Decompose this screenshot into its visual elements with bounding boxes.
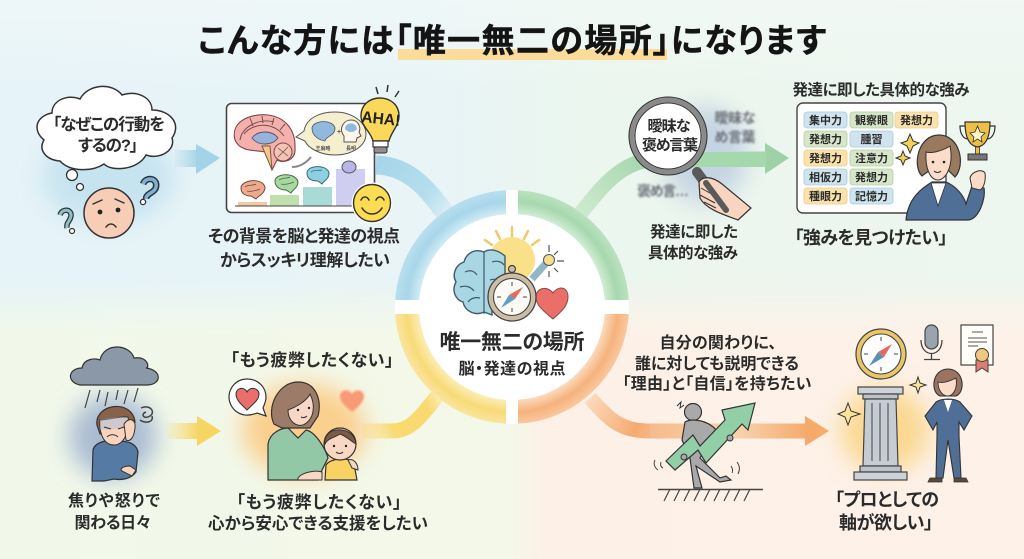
ring segment: yellow <box>395 314 506 424</box>
arrow: yellow <box>167 416 221 446</box>
chip row 2: 腫習 <box>860 132 882 146</box>
icon: question mark left <box>60 210 74 234</box>
chip row 5: 種眼力 <box>809 189 842 203</box>
icon: magnifier and hand: 褒め言葉 <box>642 137 698 154</box>
icon: worried face <box>84 188 134 238</box>
icon: compass <box>856 329 906 379</box>
caption top: 自分の関わりに、 <box>660 333 776 352</box>
icon: sparkles <box>838 377 926 425</box>
ring segment: blue <box>395 190 506 300</box>
chip row 5 <box>804 188 893 204</box>
panel: exhausted to calm (bottom left) <box>68 347 428 533</box>
blurred words <box>637 110 756 199</box>
icon: smiley <box>352 184 392 222</box>
caption top: 誰に対しても説明できる <box>635 354 799 373</box>
glow behind mother and child <box>242 384 366 476</box>
panel: professional backbone (bottom right) <box>622 325 993 533</box>
icon: confident woman <box>906 135 985 220</box>
small curved arrow <box>292 157 311 167</box>
center icon: sun, brain, compass, wand, heart <box>440 227 584 378</box>
compass <box>488 266 536 321</box>
chip row 1: 集中力 <box>809 113 842 127</box>
icon: rain cloud <box>70 347 158 408</box>
icon: mother <box>268 382 328 480</box>
caption <box>208 492 428 533</box>
central ring <box>395 190 629 424</box>
wand <box>532 245 564 279</box>
caption bottom: 「プロとしての <box>835 490 939 510</box>
connector: blue curve to ring <box>376 165 446 214</box>
icon: ground hatch <box>658 489 763 501</box>
chip row 4 <box>804 169 893 185</box>
icon: glowing heart <box>340 390 364 412</box>
chip row 1 <box>804 112 938 128</box>
card: strengths chips <box>797 103 946 213</box>
icon: certificate <box>961 325 993 372</box>
chip row 2 <box>804 131 893 147</box>
chip row 4: 相仮力 <box>809 170 842 184</box>
connector: green curve and arrow <box>580 143 789 214</box>
glow behind person <box>69 395 157 479</box>
caption: 「もう疲弊したくない」 <box>236 492 402 512</box>
blurred words: 褒め言… <box>637 183 689 199</box>
chip row 4: 発想力 <box>855 170 888 184</box>
arrow: blue <box>175 144 220 174</box>
caption bottom <box>835 490 939 533</box>
quote: 「強みを見つけたい」 <box>794 228 948 248</box>
chip row 3: 発想力 <box>809 151 842 165</box>
thought cloud bubble <box>37 86 176 170</box>
staircase bars with brains <box>235 161 365 206</box>
icon: heart speech bubble <box>229 379 266 416</box>
chip row 1: 観察眼 <box>855 113 888 127</box>
icon: magnifier and hand: 曖昧な <box>648 118 691 135</box>
heart <box>536 288 568 319</box>
title highlight <box>398 49 667 60</box>
caption bottom: 軸が欲しい」 <box>839 512 933 533</box>
chip row 2: 発想力 <box>809 132 842 146</box>
speech bubble: two brains: 王廃略 <box>315 145 331 152</box>
icon: question mark right <box>140 179 156 205</box>
icon: microphone <box>921 325 942 360</box>
center title text: 唯一無二の場所 <box>440 331 584 354</box>
icon: professional woman <box>925 369 972 482</box>
panel: brain diagram <box>226 104 374 212</box>
icon: troubled person <box>92 406 138 481</box>
chip row 3 <box>804 150 893 166</box>
caption: 焦りや怒りで <box>68 491 160 510</box>
thought dots <box>66 170 84 190</box>
chip row 1: 発想力 <box>900 113 933 127</box>
caption: 発達に即した <box>650 223 738 241</box>
title: こんな方には「唯一無二の場所」になります <box>198 22 826 59</box>
icon: column <box>854 387 907 480</box>
speech bubble: two brains: + <box>337 129 341 136</box>
speech bubble: two brains: 長明 <box>346 146 356 152</box>
caption top <box>622 333 812 393</box>
blurred words: 曖昧な <box>714 110 756 126</box>
brain <box>454 250 505 315</box>
connector: orange curve and arrow <box>590 398 829 446</box>
icon: person carrying arrow <box>654 402 755 488</box>
panel: specific strengths (top right) <box>629 81 995 262</box>
icon: magnifier and hand <box>629 97 751 220</box>
icon: child <box>324 428 358 480</box>
caption <box>208 227 400 270</box>
thought cloud bubble: するの?」 <box>78 136 138 155</box>
arrow shaft over glow <box>650 152 766 167</box>
heading: 発達に即した具体的な強み <box>792 81 970 99</box>
brain cross section <box>234 115 295 170</box>
caption: からスッキリ理解したい <box>220 251 390 270</box>
caption: その背景を脳と発達の視点 <box>208 227 400 246</box>
speech bubble: two brains <box>296 112 366 155</box>
ring segment: green <box>518 190 629 300</box>
glow behind face <box>42 132 174 224</box>
glow behind column <box>841 388 929 472</box>
icon: trophy <box>960 122 995 160</box>
blurred words: め言葉 <box>714 129 756 145</box>
ring segment: orange <box>518 314 629 424</box>
chip row 3: 注意力 <box>855 151 888 165</box>
caption: 具体的な強み <box>648 244 738 262</box>
caption: 関わる日々 <box>74 514 152 532</box>
blur glow behind magnifier <box>663 107 747 203</box>
thought cloud bubble: 「なぜこの行動を <box>53 115 165 134</box>
sun <box>485 227 539 283</box>
panel: understanding behaviour (top left) <box>37 85 401 270</box>
caption <box>648 223 738 262</box>
connector: yellow curve to ring <box>362 393 440 431</box>
icon: lightbulb AHA <box>361 85 401 153</box>
caption top: 「理由」と「自信」を持ちたい <box>622 374 812 393</box>
caption <box>68 491 160 532</box>
center subtitle text: 脳・発達の視点 <box>458 359 566 378</box>
chip row 5: 記憶力 <box>855 189 888 203</box>
caption: 心から安心できる支援をしたい <box>208 513 428 533</box>
icon: sparkles <box>896 134 919 165</box>
icon: worry swirl <box>140 407 152 422</box>
top quote: 「もう疲弊したくない」 <box>230 350 394 370</box>
icon: lightbulb AHA: AHA! <box>361 109 401 130</box>
